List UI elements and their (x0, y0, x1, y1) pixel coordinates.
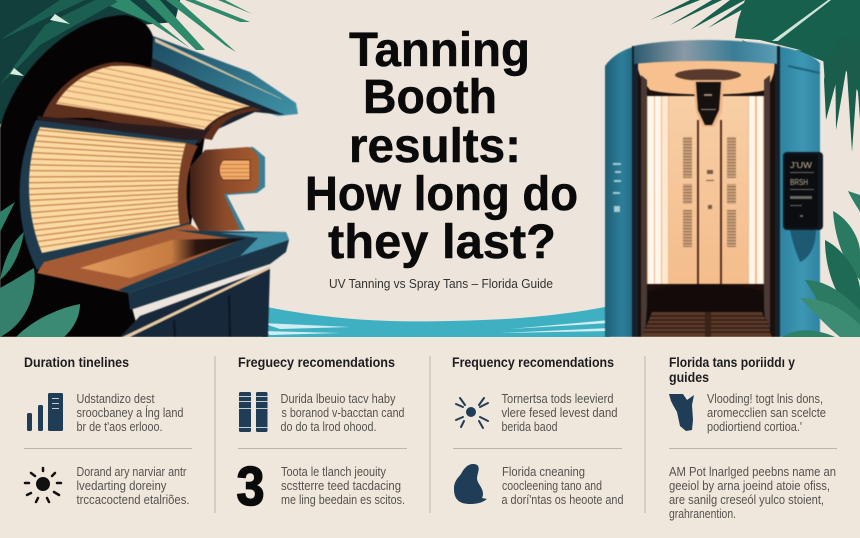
text: row two: a dorí'ntas os heoote and (502, 492, 624, 507)
booth: floor (642, 284, 772, 337)
icon: sun (25, 468, 61, 502)
text: row one: vlere fesed levest dand (502, 405, 618, 420)
panel strip (0, 337, 860, 538)
icon: florida map (669, 394, 694, 431)
text: row two: Toota le tlanch jeouity (281, 464, 386, 479)
text: row one: s boranod v-bacctan cand (282, 405, 404, 420)
heading: florida guides (669, 354, 795, 385)
booth: control panel: J'UW (790, 161, 813, 170)
dividers (24, 356, 837, 513)
subtitle: UV Tanning vs Spray Tans – Florida Guide (329, 277, 553, 291)
title: How long do (305, 168, 578, 221)
text: row two: scstterre teed tacdacing (281, 478, 401, 493)
text: row two: coocleening tano and (502, 478, 602, 493)
text: row two: geeiol by arna joeind atoie ofiss, (669, 478, 830, 493)
heading: duration timelines: Duration tinelines (24, 354, 129, 370)
heading: frequency one: Freguecy recomendations (238, 354, 395, 370)
text: row two: grahranention. (669, 506, 736, 521)
bed: base (120, 266, 270, 337)
text: row one: aromecclien san scelcte (707, 405, 826, 420)
text: row two: are sanilg creseól yulco stoient, (669, 492, 824, 507)
booth: control panel: BRSH (790, 178, 808, 187)
text: row one: br de t'aos erlooo. (76, 419, 162, 434)
text: row two: trccacoctend etalriões. (76, 492, 190, 507)
title: Booth (363, 71, 497, 124)
bed: divider band (37, 116, 212, 144)
icon: bars (27, 393, 63, 431)
leaves: bottom right front (782, 280, 860, 337)
bed: lower frame (20, 120, 198, 270)
booth: back wall (644, 96, 768, 284)
booth: center seams (697, 120, 722, 284)
title: they last? (328, 216, 556, 269)
booth: control panel (783, 152, 823, 230)
bed: upper lamp panel (42, 60, 262, 140)
text: row two (281, 464, 405, 507)
tanning bed (0, 15, 298, 337)
bed: head unit (190, 147, 265, 232)
booth: interior (636, 60, 778, 337)
text: row one: Durida lbeuio tacv haby (280, 391, 396, 406)
text: row two: Florida cneaning (502, 464, 585, 479)
text: row one (707, 391, 826, 434)
text: row one: do do ta lrod ohood. (280, 419, 376, 434)
booth: right lights (748, 96, 765, 284)
leaves: bottom left (0, 202, 80, 337)
booth: left column labels (613, 163, 621, 212)
bed: copper rim (178, 143, 198, 225)
icon: number three: 3 (236, 455, 264, 517)
booth: ceiling (638, 60, 775, 94)
palm: top right (650, 0, 860, 152)
text: row two (76, 464, 190, 507)
panel: duration timelines (24, 354, 190, 507)
text: row one: sroocbaney a ĺng land (76, 405, 184, 420)
title (305, 24, 578, 269)
text: row one (280, 391, 404, 434)
bed: front edge (128, 240, 289, 310)
booth: ceiling vent (675, 69, 741, 81)
text: row two: me ling beedain es scitos. (281, 492, 405, 507)
booth: panel shadow (790, 230, 816, 262)
text: row one: Udstandizo dest (76, 391, 155, 406)
icon: silhouette (454, 464, 487, 504)
text: row two (669, 464, 836, 521)
heading: frequency two: Frequency recomendations (452, 354, 614, 370)
heading: florida guides: Florida tans poriiddı y (669, 354, 795, 370)
text: row one: berida baod (502, 419, 558, 434)
booth: door posts (641, 75, 770, 337)
text: row two: Dorand ary narviar antr (76, 464, 187, 479)
text: row one (76, 391, 184, 434)
booth: left column (605, 46, 640, 337)
bed: surface (37, 224, 289, 293)
text: row one: Tornertsa tods leevierd (502, 391, 614, 406)
booth: top ring (634, 40, 777, 64)
booth: head console (693, 80, 724, 127)
text: row one: Vlooding! togt lnis dons, (707, 391, 823, 406)
panel: frequency recommendations one (236, 354, 405, 517)
text: row two: lvedarting doreiny (76, 478, 167, 493)
water wave (262, 306, 610, 337)
bed: lower lamp panel (28, 126, 186, 254)
panel: florida guides (669, 354, 836, 521)
icon: sun rays (456, 398, 488, 428)
palm: top left (0, 0, 252, 125)
icon: columns (239, 392, 268, 432)
title: results: (349, 120, 521, 173)
booth: left lights (648, 96, 669, 284)
bed: head lamp (219, 160, 250, 180)
booth: right column (776, 46, 820, 337)
bed: black hood (0, 15, 205, 337)
booth: vents (683, 137, 736, 247)
text: row one: podiortiend cortioa.' (707, 419, 802, 434)
tanning booth (605, 40, 823, 337)
leaves: bottom right (825, 191, 860, 323)
bed: mirror (80, 238, 246, 278)
title: Tanning (349, 24, 530, 77)
text: row two: AM Pot lnarlged peebns name an (669, 464, 836, 479)
panel: frequency recommendations two (452, 354, 624, 507)
bed: canopy (150, 36, 298, 135)
text: row two (502, 464, 624, 507)
heading: florida guides: guides (669, 369, 709, 385)
booth: center details (706, 170, 714, 209)
text: row one (502, 391, 618, 434)
